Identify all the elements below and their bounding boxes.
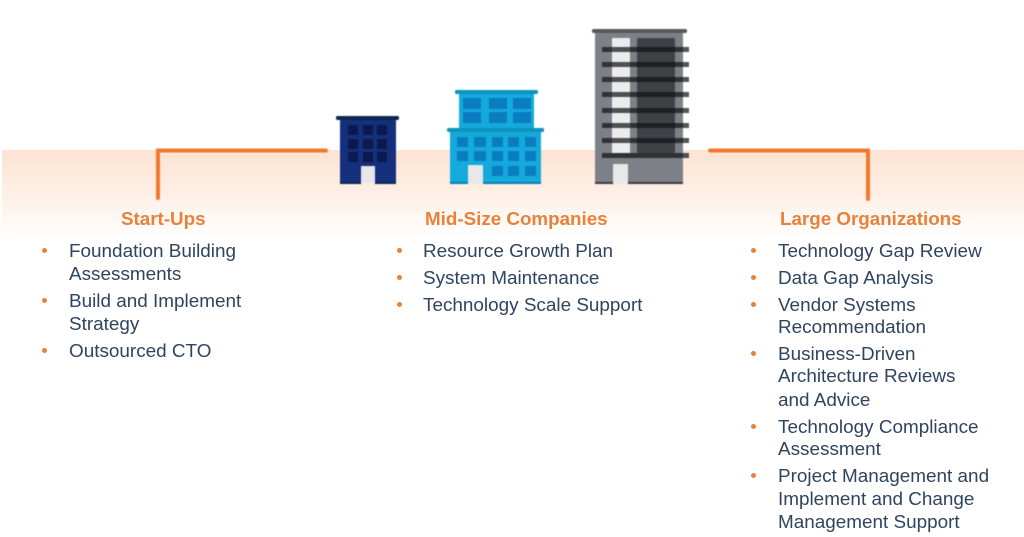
left orange connector: [158, 150, 326, 198]
right orange connector: [710, 150, 868, 199]
list: Mid-Size services: System Maintenance: [423, 268, 599, 289]
list: Large Organizations services: Implement and Change: [778, 489, 974, 510]
list: Mid-Size services: Technology Scale Support: [423, 295, 642, 316]
heading: Mid-Size Companies: Mid-Size Companies: [425, 208, 608, 229]
list: Large Organizations services: Vendor Systems: [778, 295, 916, 316]
list: Start-Ups services: Build and Implement: [69, 291, 241, 312]
list: Large Organizations services: Management Support: [778, 512, 960, 533]
icon: small building: [336, 116, 399, 184]
list: Start-Ups services: Assessments: [69, 264, 181, 285]
list: Large Organizations services: Technology Compliance: [778, 417, 979, 438]
list: Start-Ups services: Outsourced CTO: [69, 341, 211, 362]
list: Large Organizations services: Architecture Reviews: [778, 366, 955, 387]
heading: Large Organizations: Large Organizations: [780, 208, 962, 229]
list: Start-Ups services: Strategy: [69, 314, 139, 335]
heading: Start-Ups: Start-Ups: [121, 208, 206, 229]
icon: mid-size building: [447, 90, 544, 184]
list: Mid-Size services: Resource Growth Plan: [423, 241, 613, 262]
icon: large building: [592, 29, 689, 184]
peach horizon band: [2, 150, 1024, 238]
list: Start-Ups services: Foundation Building: [69, 241, 236, 262]
list: Large Organizations services: Data Gap Analysis: [778, 268, 933, 289]
list: Large Organizations services: Technology Gap Review: [778, 241, 982, 262]
list: Large Organizations services: Assessment: [778, 439, 881, 460]
list: Large Organizations services: and Advice: [778, 390, 870, 411]
list: Large Organizations services: Project Management and: [778, 466, 989, 487]
list: Large Organizations services: Recommendation: [778, 317, 926, 338]
list: Large Organizations services: Business-Driven: [778, 344, 916, 365]
